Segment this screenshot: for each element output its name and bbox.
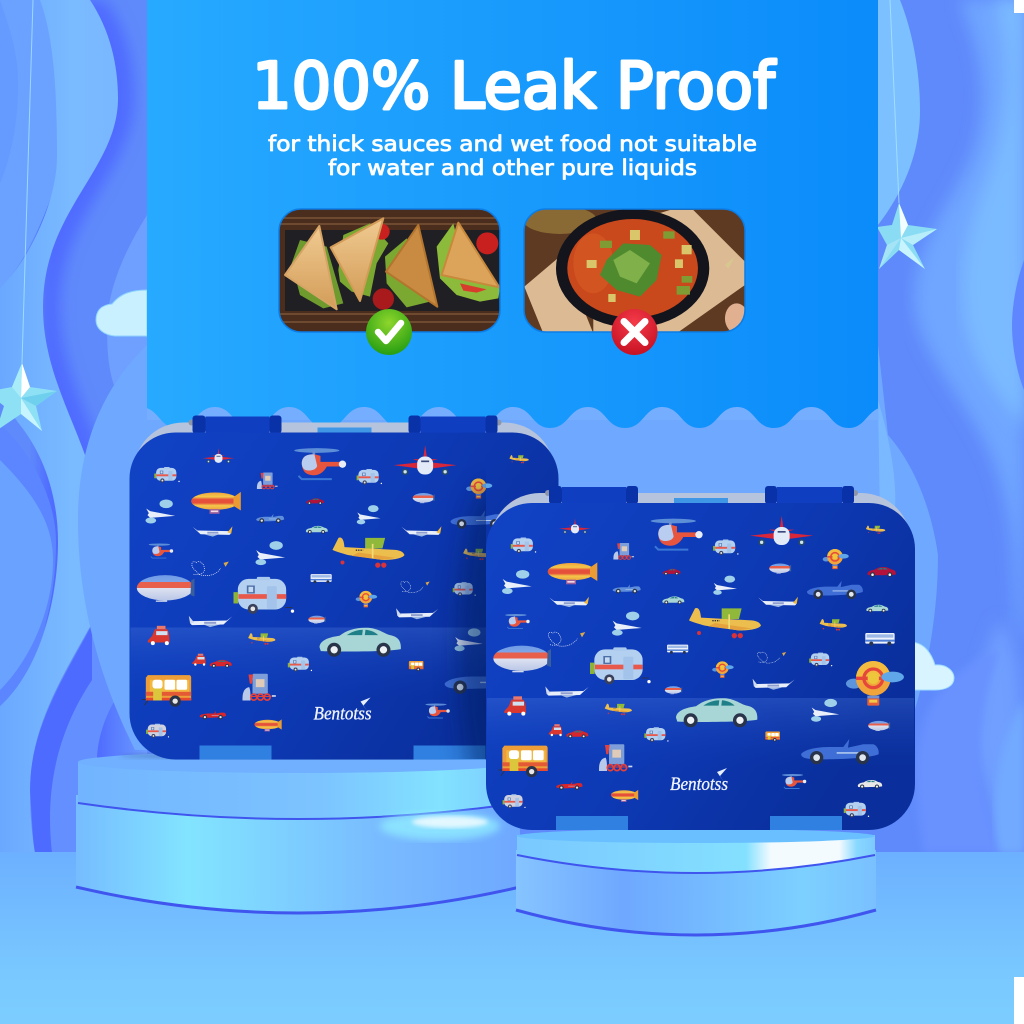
background: left wave bands bbox=[0, 0, 147, 853]
lunchbox: right bbox=[486, 486, 915, 830]
icon: green check bbox=[366, 309, 412, 355]
background: right wave bands bbox=[915, 0, 1024, 853]
icon: right cloud bbox=[905, 642, 954, 690]
subtitle line 2: for water and other pure liquids bbox=[328, 156, 697, 180]
icon: left star bbox=[0, 363, 57, 431]
shadow of right box on left box bbox=[444, 478, 486, 759]
icon: right star bbox=[877, 203, 937, 269]
hanging string: left bbox=[22, 0, 33, 363]
hanging string: right bbox=[890, 0, 899, 203]
subtitle line 1: for thick sauces and wet food not suitable bbox=[268, 132, 757, 156]
icon: red cross bbox=[612, 309, 658, 355]
background: central arch behind boxes bbox=[78, 345, 938, 750]
photo: sandwiches bbox=[279, 209, 500, 332]
white corners bbox=[1014, 0, 1024, 1024]
brand text: right: Bentotss bbox=[670, 774, 728, 795]
icon: left cloud bbox=[96, 290, 147, 336]
photo: stew bowl bbox=[523, 206, 748, 333]
left podium bbox=[76, 751, 520, 913]
background: inner right lobe bbox=[878, 400, 895, 520]
photo outline: sandwiches bbox=[279, 209, 500, 332]
right podium bbox=[516, 829, 876, 935]
title: 100% Leak Proof bbox=[252, 50, 776, 124]
floor bbox=[0, 852, 1024, 1024]
brand text: left: Bentotss bbox=[314, 704, 372, 724]
background: light lobe top right bbox=[878, 0, 920, 225]
photo outline: stew bbox=[524, 209, 745, 332]
lunchbox: left bbox=[130, 416, 558, 760]
panel: blue banner bbox=[140, 0, 886, 428]
